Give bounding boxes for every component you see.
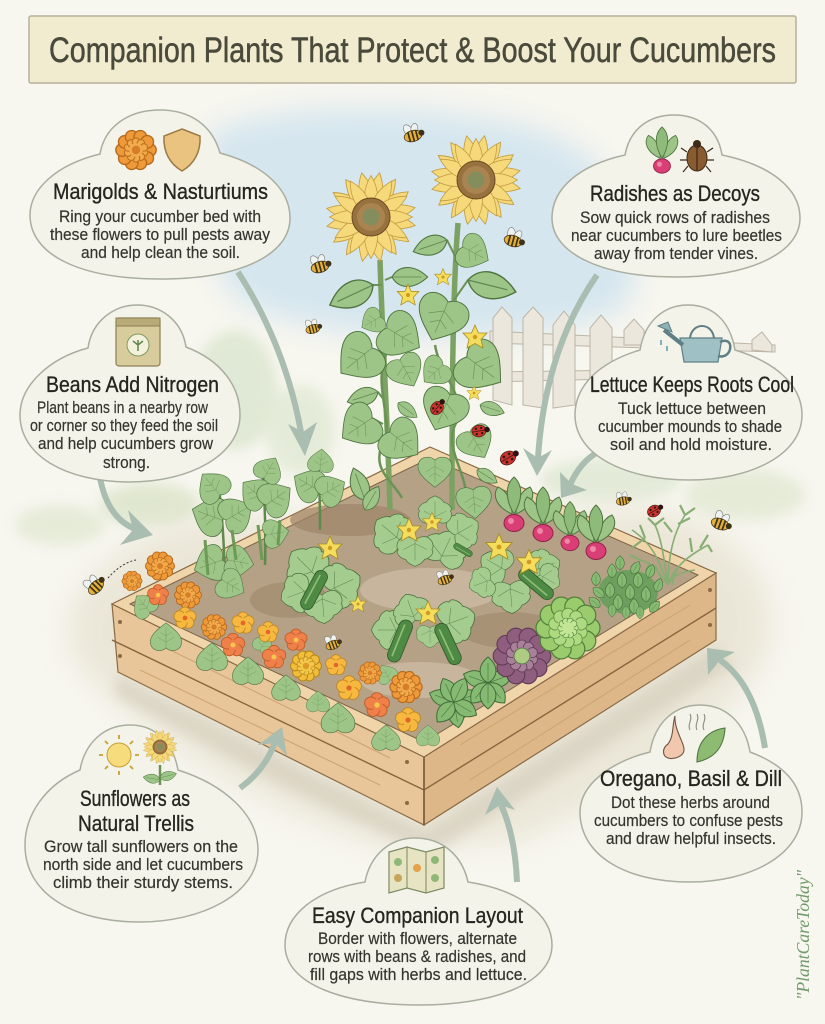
icon: beetle [680, 140, 714, 172]
icon: sun [99, 735, 139, 775]
icon: radish [646, 127, 678, 173]
body text: Ring your cucumber bed with [59, 207, 261, 226]
cucumber plant left [274, 536, 369, 625]
heading: Radishes as Decoys [590, 181, 760, 206]
sunflower stems and leaves [325, 223, 519, 520]
picket fence [490, 307, 775, 408]
heading: Marigolds & Nasturtiums [53, 179, 268, 204]
body text: Plant beans in a nearby row [37, 398, 209, 417]
body text: climb their sturdy stems. [53, 873, 233, 892]
ladybugs [428, 396, 666, 519]
sky watercolor wash [198, 109, 635, 338]
panel: lettuce keeps roots cool [575, 305, 802, 480]
body text: near cucumbers to lure beetles [571, 226, 782, 245]
arrow: layout to bed [485, 787, 517, 882]
cucumber plant front [371, 588, 482, 667]
raised wooden bed [112, 447, 735, 855]
icon: seed bag [116, 318, 160, 366]
soil [130, 458, 698, 742]
panel: beans add nitrogen [20, 305, 240, 482]
bean plants [186, 448, 385, 606]
arrow: lettuce to bed [560, 452, 598, 498]
body text: these flowers to pull pests away [50, 225, 270, 244]
cucumber plant back [363, 496, 487, 573]
body text: Dot these herbs around [611, 793, 770, 812]
radishes [495, 477, 615, 560]
red-leaf lettuce [493, 628, 551, 684]
arrow: sunflowers to bed [240, 727, 287, 788]
body text [598, 399, 782, 454]
arrow: beans to bed [100, 478, 153, 545]
icon: herb leaf [697, 728, 725, 762]
sunflower head right [430, 134, 522, 226]
panel: marigolds and nasturtiums [30, 110, 290, 279]
body text: soil and hold moisture. [610, 435, 772, 454]
body text [308, 929, 527, 984]
body text [50, 207, 270, 262]
icon: marigold [116, 131, 156, 169]
arrow: marigolds to bed [238, 272, 317, 456]
cucumber plant right [464, 534, 567, 615]
bed rim [112, 447, 716, 757]
arrow: herbs to bed [707, 648, 765, 748]
body text: strong. [103, 453, 150, 472]
body text [594, 793, 783, 848]
sunflower head left [325, 171, 417, 263]
body text: Sow quick rows of radishes [580, 208, 770, 227]
bed right wall [424, 573, 716, 825]
heading: Beans Add Nitrogen [46, 372, 219, 397]
basil [427, 657, 515, 729]
panel: oregano, basil and dill [580, 705, 802, 882]
panel: radishes as decoys [552, 115, 800, 277]
body text: rows with beans & radishes, and [308, 947, 526, 966]
body text: or corner so they feed the soil [30, 416, 218, 435]
icon: shield [164, 129, 200, 171]
marigolds and nasturtiums [122, 552, 422, 731]
oregano [586, 556, 665, 619]
title banner [29, 16, 796, 83]
body text: Border with flowers, alternate [318, 929, 517, 948]
panel: sunflowers as natural trellis [25, 725, 258, 922]
flower leaves border [126, 588, 440, 750]
body text: cucumbers to confuse pests [594, 811, 783, 830]
body text: and draw helpful insects. [606, 829, 776, 848]
green lettuce [536, 597, 600, 659]
body text: Tuck lettuce between [618, 399, 766, 418]
heading: Easy Companion Layout [312, 903, 523, 928]
heading: Natural Trellis [78, 811, 194, 836]
icon: nose and scent [664, 714, 705, 759]
body text: north side and let cucumbers [43, 855, 243, 874]
body text: Grow tall sunflowers on the [44, 837, 238, 856]
small stem flowers [397, 269, 487, 400]
heading [78, 786, 194, 836]
bed shadow [115, 645, 735, 855]
icon: watering can [658, 322, 730, 362]
arrow: radishes to bed [523, 275, 597, 476]
ground wash [70, 510, 771, 850]
body text [30, 398, 218, 472]
heading: Sunflowers as [80, 786, 190, 811]
body text [43, 837, 243, 892]
bed left wall [112, 604, 424, 825]
body text: fill gaps with herbs and lettuce. [310, 965, 527, 984]
body text: and help cucumbers grow [38, 434, 214, 453]
signature: "PlantCareToday" [793, 870, 813, 1000]
dotted bee trail [108, 560, 136, 578]
icon: small sunflower [142, 730, 178, 785]
heading: Oregano, Basil & Dill [600, 766, 782, 791]
soil highlights [250, 504, 560, 698]
body text [571, 208, 782, 263]
bees [80, 119, 736, 652]
icon: folded garden map [389, 847, 444, 893]
body text: and help clean the soil. [81, 243, 240, 262]
body text: cucumber mounds to shade [598, 417, 782, 436]
background foliage wash [15, 330, 805, 545]
dill [630, 505, 712, 585]
panel: easy companion layout [285, 838, 552, 1005]
body text: away from tender vines. [594, 244, 758, 263]
